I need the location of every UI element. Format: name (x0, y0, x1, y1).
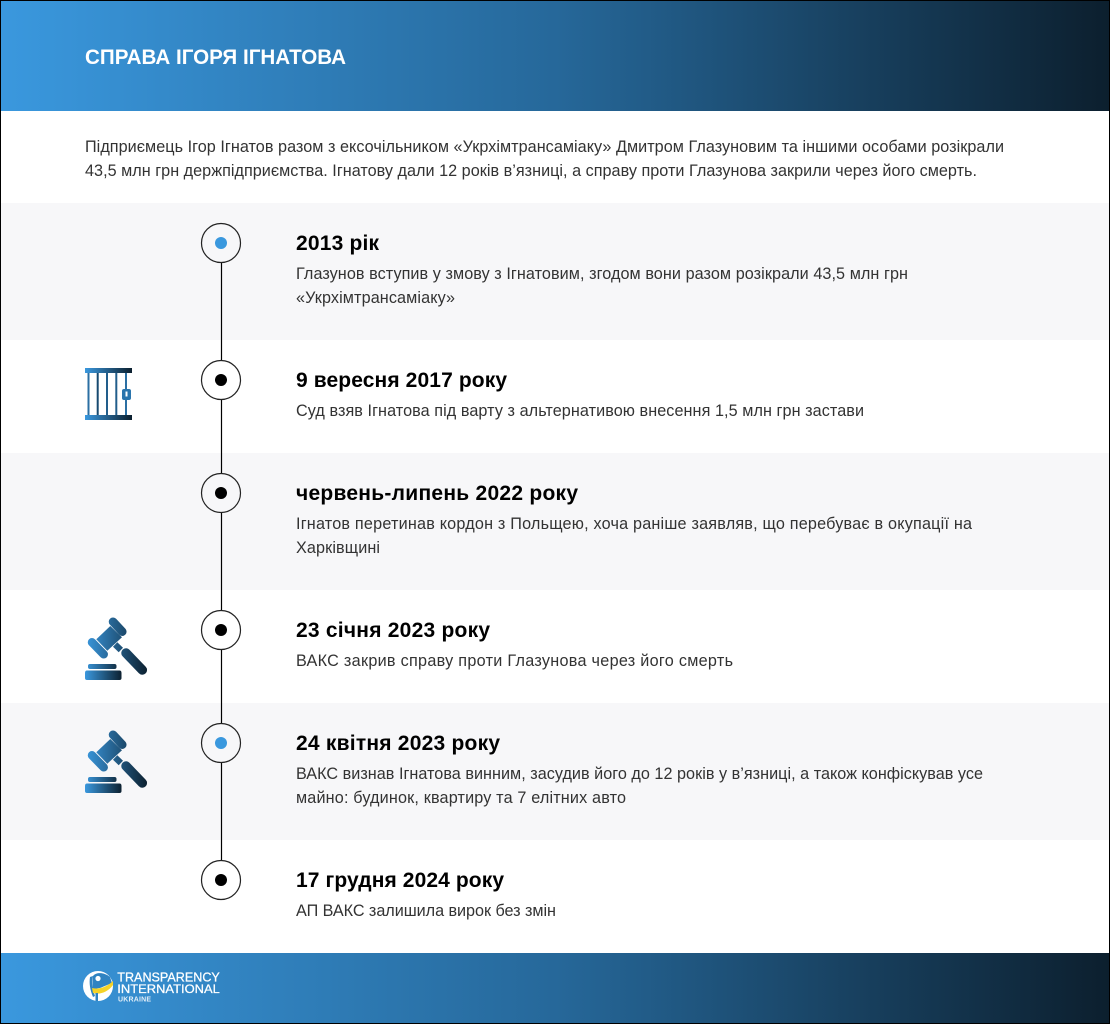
timeline entry: June-July 2022 (202, 474, 972, 557)
timeline line (220, 243, 222, 880)
intro text: Підприємець Ігор Ігнатов разом з ексочільником «Укрхімтрансаміаку» Дмитром Глазуновим та іншими особами розікрали (85, 138, 1004, 156)
logo: Transparency International Ukraine (83, 970, 220, 1003)
logo wordmark: TRANSPARENCY (117, 970, 220, 984)
date: 17 грудня 2024 року (296, 869, 504, 892)
description (296, 515, 972, 557)
description: ВАКС визнав Ігнатова винним, засудив його до 12 років у в’язниці, а також конфіскував усе (296, 765, 983, 783)
description (296, 265, 908, 307)
description: «Укрхімтрансаміаку» (296, 289, 455, 307)
description: ВАКС закрив справу проти Глазунова через його смерть (296, 652, 733, 670)
description: Харківщині (296, 539, 380, 557)
date: 24 квітня 2023 року (296, 732, 500, 755)
icon: prison bars (85, 368, 132, 420)
title: СПРАВА ІГОРЯ ІГНАТОВА (85, 46, 346, 69)
description: Суд взяв Ігнатова під варту з альтернативою внесення 1,5 млн грн застави (296, 402, 864, 420)
timeline entry: 23 January 2023 (202, 610, 733, 670)
description: Ігнатов перетинав кордон з Польщею, хоча раніше заявляв, що перебуває в окупації на (296, 515, 972, 533)
marker: black dot (202, 610, 240, 650)
header banner (1, 1, 1109, 111)
logo emblem (83, 971, 113, 1001)
logo wordmark: UKRAINE (118, 996, 151, 1003)
marker: blue dot (202, 724, 240, 762)
timeline entry: 2013 (202, 224, 908, 307)
footer banner (1, 953, 1109, 1023)
description (296, 765, 983, 807)
date: 2013 рік (296, 232, 379, 255)
marker: black dot (202, 860, 240, 900)
intro text (85, 138, 1004, 180)
icon: gavel (85, 622, 142, 680)
timeline entry: 9 September 2017 (202, 360, 864, 420)
date: 9 вересня 2017 року (296, 369, 507, 392)
intro text: 43,5 млн грн держпідприємства. Ігнатову дали 12 років в’язниці, а справу проти Глазунова закрили через його смерть. (85, 162, 977, 180)
marker: blue dot (202, 224, 240, 262)
timeline entry: 17 December 2024 (202, 860, 556, 920)
marker: black dot (202, 474, 240, 512)
description: АП ВАКС залишила вирок без змін (296, 902, 556, 920)
icon: gavel (85, 735, 142, 793)
logo wordmark (117, 970, 220, 1003)
marker: black dot (202, 360, 240, 400)
timeline entry: 24 April 2023 (202, 724, 983, 807)
date: 23 січня 2023 року (296, 619, 490, 642)
logo wordmark: INTERNATIONAL (117, 982, 220, 996)
description: майно: будинок, квартиру та 7 елітних авто (296, 789, 626, 807)
description: Глазунов вступив у змову з Ігнатовим, згодом вони разом розікрали 43,5 млн грн (296, 265, 908, 283)
date: червень-липень 2022 року (296, 482, 578, 505)
row backgrounds (1, 203, 1109, 840)
